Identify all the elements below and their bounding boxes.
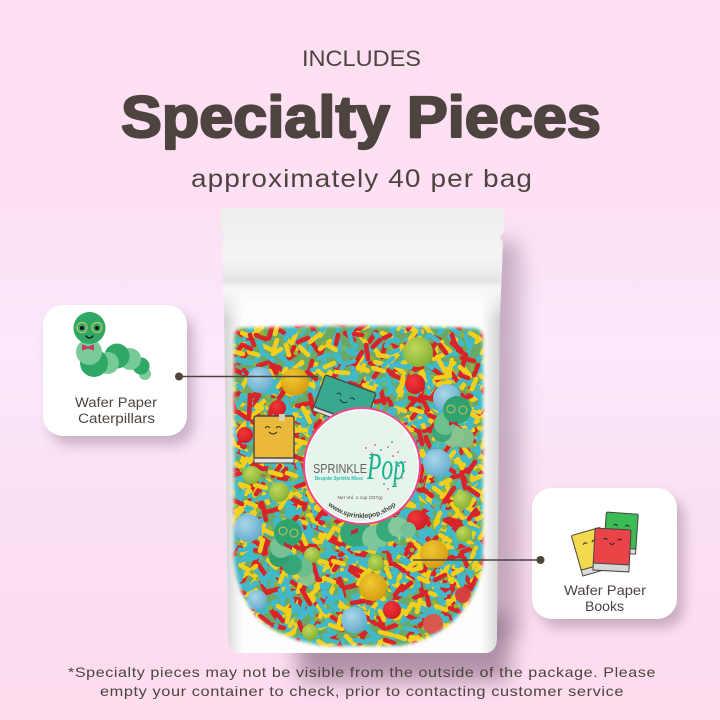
sticker url: www.sprinklepop.shop [328,502,396,519]
footnote: empty your container to check, prior to contacting customer service [100,683,624,699]
connector: books [413,556,544,564]
confetti dots on sticker [365,441,406,490]
footnote: *Specialty pieces may not be visible from the outside of the package. Please [68,664,656,680]
subtitle: approximately 40 per bag: approximately 40 per bag [191,165,533,193]
card text: Wafer Paper [75,395,158,410]
sprinkle window [232,323,486,649]
card: wafer paper caterpillars [43,305,194,445]
connector: caterpillars [175,372,318,380]
wafer caterpillar under label [340,517,416,551]
pouch upper seal and zipper [221,208,504,320]
card: wafer paper books [532,488,684,628]
icon: caterpillar [74,312,151,380]
decorative candy balls [234,337,472,640]
wafer teal book [312,374,376,417]
card text: Wafer Paper [564,583,647,598]
brand word pop: Pop [366,446,405,488]
brand tagline: Bespoke Sprinkle Mixes [315,476,363,482]
title: specialty pieces: Specialty Pieces [121,85,601,150]
net volume: Net Vol. 1 cup (227g) [337,495,383,501]
wafer caterpillar upper right [432,396,474,448]
pouch of sprinkles [221,208,504,653]
bag drop shadow [258,240,520,681]
pouch body [221,208,504,653]
icon: stack of books [571,512,638,576]
wafer yellow book [254,414,294,463]
round sprinkle pop sticker [303,407,421,525]
card text: Caterpillars [78,411,155,426]
card text: Books [585,599,624,614]
brand word sprinkle: SPRINKLE [313,462,367,476]
label: includes: INCLUDES [302,46,421,71]
wafer caterpillar lower left [269,519,315,586]
